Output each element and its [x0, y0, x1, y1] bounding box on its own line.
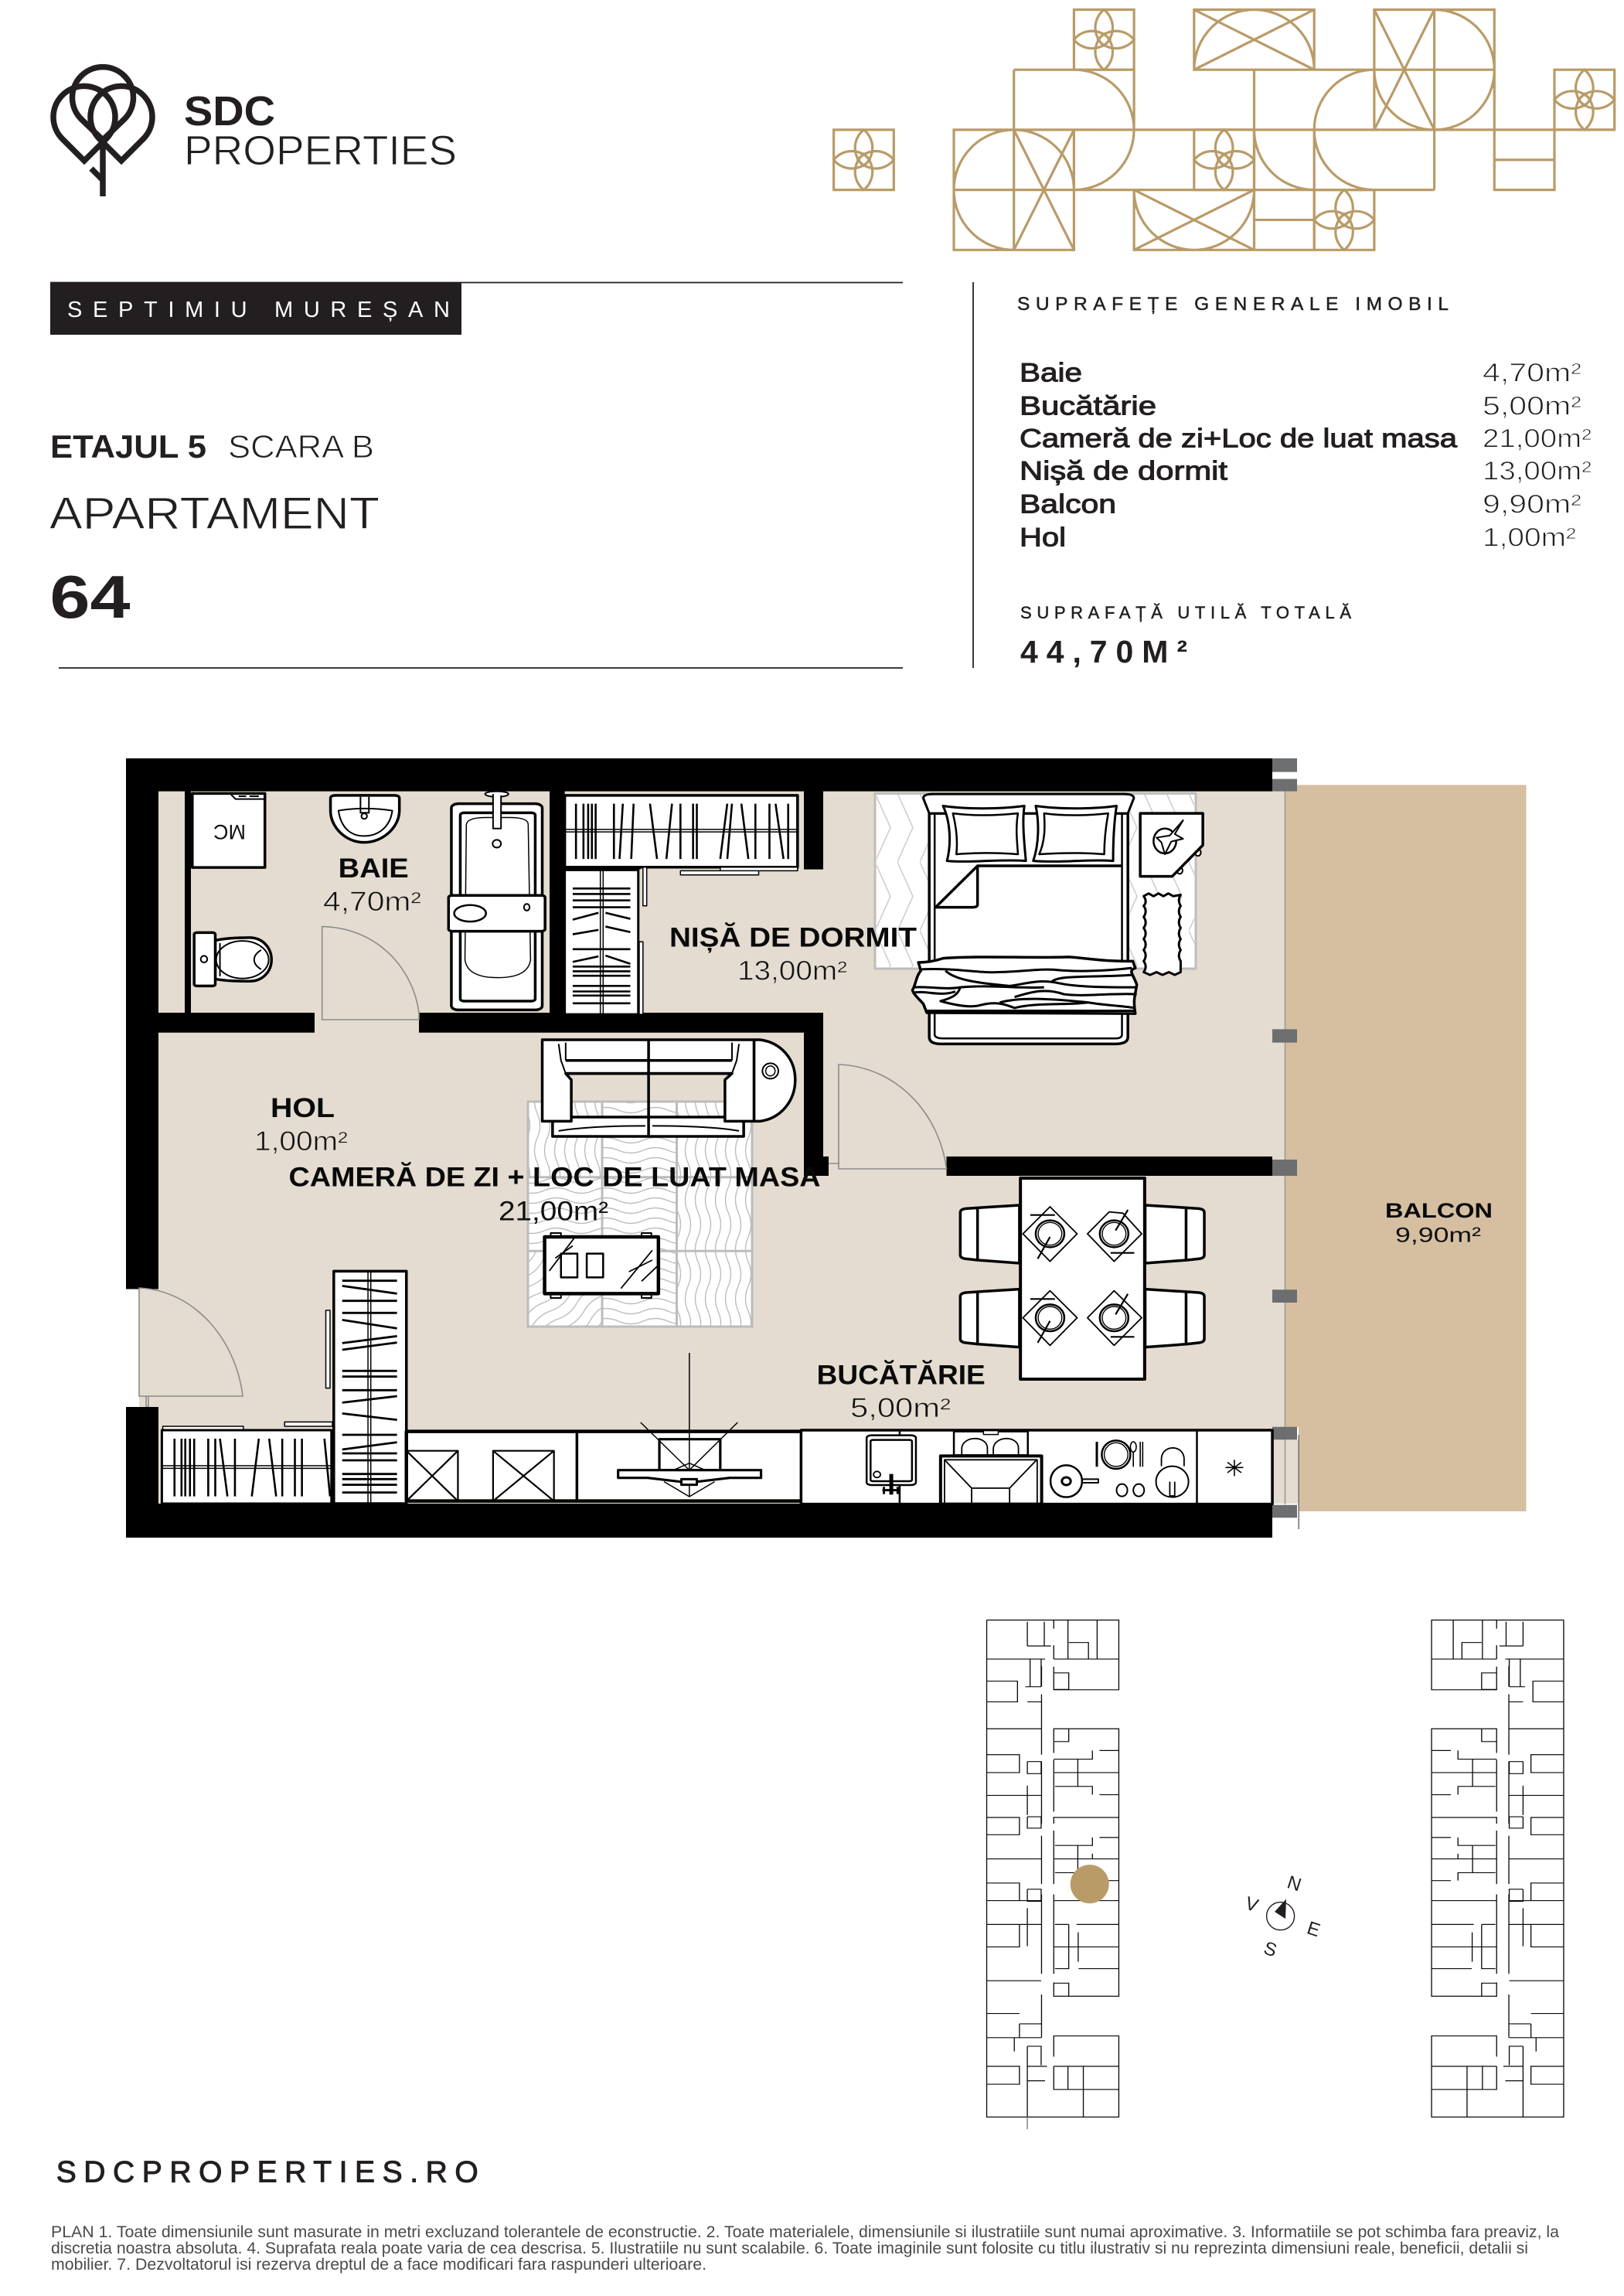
label: balcony: 9,90m²	[1395, 1224, 1481, 1247]
label: balcony	[1385, 1199, 1493, 1247]
interior floor	[139, 791, 1299, 1504]
room names list: Baie	[1020, 359, 1082, 388]
wardrobe: hall base unit	[162, 1422, 332, 1504]
label: hall: HOL	[271, 1093, 335, 1123]
room areas list: 9,90m²	[1483, 490, 1581, 519]
label: sleeping niche: 13,00m²	[737, 956, 847, 986]
nightstand with lamp	[1140, 813, 1203, 877]
kitchenware on the worktop	[1050, 1440, 1189, 1497]
room areas list: 21,00m²	[1483, 424, 1592, 453]
door: bathroom	[322, 927, 419, 1020]
toilet	[194, 932, 271, 986]
website: SDCPROPERTIES.RO	[56, 2156, 478, 2189]
compass letters: E	[1305, 1918, 1323, 1941]
dining area and right kitchen units	[801, 1178, 1272, 1504]
vertical divider	[972, 282, 974, 668]
room names list: Nișă de dormit	[1020, 456, 1228, 485]
place settings	[1023, 1207, 1142, 1345]
facade pillars	[1272, 758, 1299, 1529]
balcony	[1285, 785, 1526, 1511]
legal footnote: discretia noastra absoluta. 4. Suprafata reala poate varia de cea descrisa. 5. Ilustratiile nu sunt scalabile. 6. Toate imaginile sunt folosite cu titlu ilustrativ si nu reprezinta dimensiuni reale, beneficii, detalii si	[51, 2240, 1528, 2257]
staircase label: SCARA B	[228, 428, 374, 465]
glazing line	[1285, 791, 1286, 1504]
logo: SDC Properties	[53, 67, 457, 196]
panel: surfaces summary	[1017, 294, 1592, 669]
kitchen units left	[407, 1432, 802, 1501]
room areas list: 4,70m²	[1483, 359, 1581, 388]
room names list: Balcon	[1020, 490, 1116, 519]
apartment number: 64	[49, 563, 130, 631]
compass letters	[1243, 1872, 1323, 1961]
label: living and dining	[289, 1162, 821, 1226]
header rule bottom	[59, 667, 903, 669]
label: living and dining: 21,00m²	[499, 1196, 608, 1226]
compass letters: N	[1285, 1872, 1304, 1896]
label: hall: 1,00m²	[254, 1126, 348, 1157]
kitchen sink	[866, 1436, 916, 1494]
floor label: ETAJUL 5	[50, 428, 206, 465]
label: sleeping niche	[669, 922, 917, 986]
bathtub	[448, 792, 545, 1010]
wardrobe: sleeping niche vertical	[565, 869, 641, 1014]
floor plan	[126, 758, 1526, 1538]
total area label: SUPRAFAȚĂ UTILĂ TOTALĂ	[1020, 603, 1351, 622]
key plan: right wing	[1432, 1620, 1564, 2117]
decorative geometric gold pattern	[834, 9, 1615, 250]
compass	[1243, 1872, 1323, 1961]
sofa	[543, 1040, 795, 1136]
bathroom fixtures and wardrobes (upper left)	[192, 792, 798, 1136]
address badge: SEPTIMIU MUREȘAN	[67, 298, 450, 322]
bed and nightstand	[912, 794, 1203, 1044]
legal footnote: PLAN 1. Toate dimensiunile sunt masurate in metri excluzand tolerantele de econstructie. 2. Toate materialele, dimensiunile si ilustratiile sunt numai aproximative. 3. Informatiile se pot schimba fara preaviz, la	[51, 2223, 1559, 2241]
address badge	[50, 283, 461, 335]
room areas list: 13,00m²	[1483, 456, 1592, 485]
washbasin	[331, 795, 400, 843]
wardrobe: sleeping niche horizontal	[565, 795, 798, 1014]
label: balcony: BALCON	[1385, 1199, 1493, 1222]
room areas list	[1483, 359, 1592, 552]
label: bathroom	[323, 853, 421, 917]
key plan tail	[1026, 2117, 1028, 2129]
pillow left	[943, 806, 1026, 861]
rug: bedroom	[875, 793, 1196, 969]
icon: extractor star	[1225, 1460, 1243, 1476]
apartment heading	[49, 428, 380, 631]
compass needle	[1275, 1899, 1286, 1919]
label: bathroom: BAIE	[339, 853, 409, 884]
label: kitchen: 5,00m²	[850, 1393, 951, 1423]
cooker hood	[618, 1353, 761, 1497]
room names list: Bucătărie	[1020, 391, 1156, 421]
door: entrance	[139, 1288, 243, 1406]
kitchen counter	[801, 1430, 1272, 1504]
room areas list: 1,00m²	[1483, 523, 1576, 552]
apartment word: APARTAMENT	[49, 489, 380, 539]
panel heading: SUPRAFEȚE GENERALE IMOBIL	[1017, 294, 1449, 315]
room names list	[1020, 359, 1457, 552]
coffee table, hall wardrobes and left kitchen units	[162, 1233, 802, 1504]
marker: apartment location	[1071, 1865, 1109, 1903]
compass dial	[1267, 1903, 1295, 1930]
oven and niche	[941, 1431, 1042, 1504]
total area value: 44,70M²	[1020, 634, 1187, 669]
label: sleeping niche: NIȘĂ DE DORMIT	[669, 922, 917, 952]
room areas list: 5,00m²	[1483, 391, 1581, 421]
washing machine	[192, 793, 265, 867]
header rule top	[50, 281, 903, 283]
label: kitchen: BUCĂTĂRIE	[817, 1361, 986, 1391]
door: living to sleeping niche	[829, 1065, 946, 1169]
washing machine marking: MC	[213, 820, 246, 843]
coffee table	[545, 1233, 659, 1298]
logo wordmark SDC: SDC	[184, 88, 275, 135]
logo wordmark PROPERTIES: PROPERTIES	[184, 128, 457, 174]
pillow right	[1033, 806, 1117, 861]
bedside mat	[1144, 894, 1180, 975]
rug: living room	[528, 1102, 752, 1327]
room names list: Hol	[1020, 523, 1066, 552]
legal footnote: mobilier. 7. Dezvoltatorul isi rezerva dreptul de a face modificari fara raspunderi ulterioare.	[51, 2256, 706, 2274]
walls	[126, 758, 1272, 1538]
label: living and dining: CAMERĂ DE ZI + LOC DE LUAT MASA	[289, 1162, 821, 1192]
bed frame	[924, 794, 1134, 1044]
bed sheet fold	[935, 866, 1122, 908]
label: bathroom: 4,70m²	[323, 887, 421, 917]
key plan: building floor	[987, 1620, 1564, 2129]
wardrobe: hall tall unit	[326, 1271, 407, 1504]
label: hall	[254, 1093, 348, 1157]
dining chairs	[960, 1205, 1204, 1347]
compass letters: V	[1243, 1893, 1261, 1916]
compass letters: S	[1261, 1938, 1279, 1961]
dining table	[1020, 1178, 1145, 1379]
label: kitchen	[817, 1361, 986, 1423]
duvet	[912, 957, 1137, 1013]
room names list: Cameră de zi+Loc de luat masa	[1020, 424, 1457, 453]
legal footnote	[51, 2223, 1559, 2274]
icon: tree logo	[53, 67, 152, 196]
key plan: left wing	[987, 1620, 1118, 2117]
